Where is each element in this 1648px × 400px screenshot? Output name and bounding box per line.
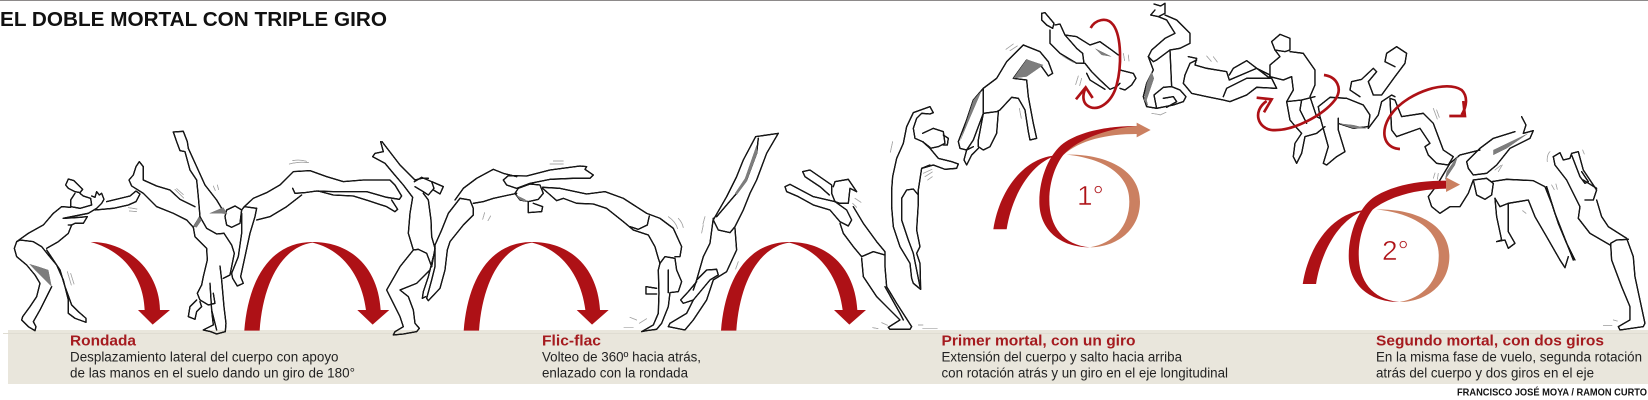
figure: gymnast upside down tucked [1143, 3, 1190, 115]
text block: Segundo mortal: En la misma fase de vuelo, segunda rotación [1376, 350, 1642, 365]
figure: gymnast in vertical handstand [668, 133, 778, 330]
figure: gymnast landing with arms up [1547, 150, 1645, 330]
text block: Segundo mortal: Segundo mortal, con dos giros [1376, 333, 1604, 350]
text block: Flic-flac: Flic-flac [542, 333, 601, 350]
rotation arrow 1 [1076, 20, 1120, 108]
gymnast sequence: flic-flac [373, 133, 778, 335]
figure: gymnast bent with legs down [1473, 178, 1575, 268]
text block: Rondada: de las manos en el suelo dando un giro de 180° [70, 366, 355, 381]
spiral label 1: 1° [1077, 180, 1104, 211]
arrow: arch over flic-flac [464, 242, 609, 331]
rotation arrow 3 [1384, 86, 1466, 149]
arrow: rondada entry [91, 242, 170, 325]
title: EL DOBLE MORTAL CON TRIPLE GIRO [0, 8, 387, 31]
ground band [8, 330, 1648, 384]
gymnast sequence: tucked rotations [1143, 3, 1453, 165]
figure: gymnast jumping upwards [890, 107, 958, 289]
text block: Segundo mortal: atrás del cuerpo y dos giros en el eje [1376, 366, 1594, 381]
figure: gymnast horizontal with knees bent [1183, 56, 1277, 102]
text block: Rondada [70, 333, 355, 381]
text block: Flic-flac [542, 333, 701, 381]
text block: Flic-flac: Volteo de 360º hacia atrás, [542, 350, 701, 365]
spiral arrow: first somersault [993, 123, 1151, 247]
figure: gymnast in horizontal flip [209, 160, 402, 286]
figure: gymnast seated in the air [1318, 47, 1407, 165]
figure: gymnast arching backwards [422, 161, 593, 301]
text block: Primer mortal [942, 333, 1228, 381]
figure: gymnast leaning arms forward [785, 170, 937, 329]
text block: Rondada: Desplazamiento lateral del cuerpo con apoyo [70, 350, 338, 365]
spiral label 2: 2° [1382, 235, 1409, 266]
text block: Flic-flac: enlazado con la rondada [542, 366, 688, 381]
gymnast sequence: take-off [785, 107, 958, 329]
rotation arrow 2 [1257, 75, 1339, 130]
arrow: arch over rondada [244, 242, 389, 331]
text block: Segundo mortal [1376, 333, 1642, 381]
figure: gymnast starting rondada [14, 179, 140, 331]
figure: gymnast inclined piked [958, 44, 1053, 165]
text block: Primer mortal: con rotación atrás y un giro en el eje longitudinal [942, 366, 1228, 381]
text block: Primer mortal: Extensión del cuerpo y salto hacia arriba [942, 350, 1182, 365]
figure: gymnast in split handstand [129, 131, 234, 334]
figure: gymnast in bridge handstand [543, 187, 683, 332]
gymnast sequence: first somersault [958, 13, 1136, 165]
gymnast sequence: landing [1428, 117, 1645, 330]
figure: gymnast seen from behind [1270, 34, 1325, 163]
figure: gymnast twisting with bent leg [1390, 98, 1453, 165]
text block: Primer mortal: Primer mortal, con un giro [942, 333, 1136, 350]
figure: gymnast rotating with legs up [1042, 13, 1136, 90]
text block: Rondada: Rondada [70, 333, 137, 350]
figure: gymnast standing arms up [373, 142, 443, 335]
arrow: arch before take-off [721, 242, 866, 331]
gymnast sequence: rondada [14, 131, 402, 334]
spiral arrow: second somersault [1303, 177, 1460, 302]
figure: gymnast upside down crossing [1428, 117, 1533, 213]
